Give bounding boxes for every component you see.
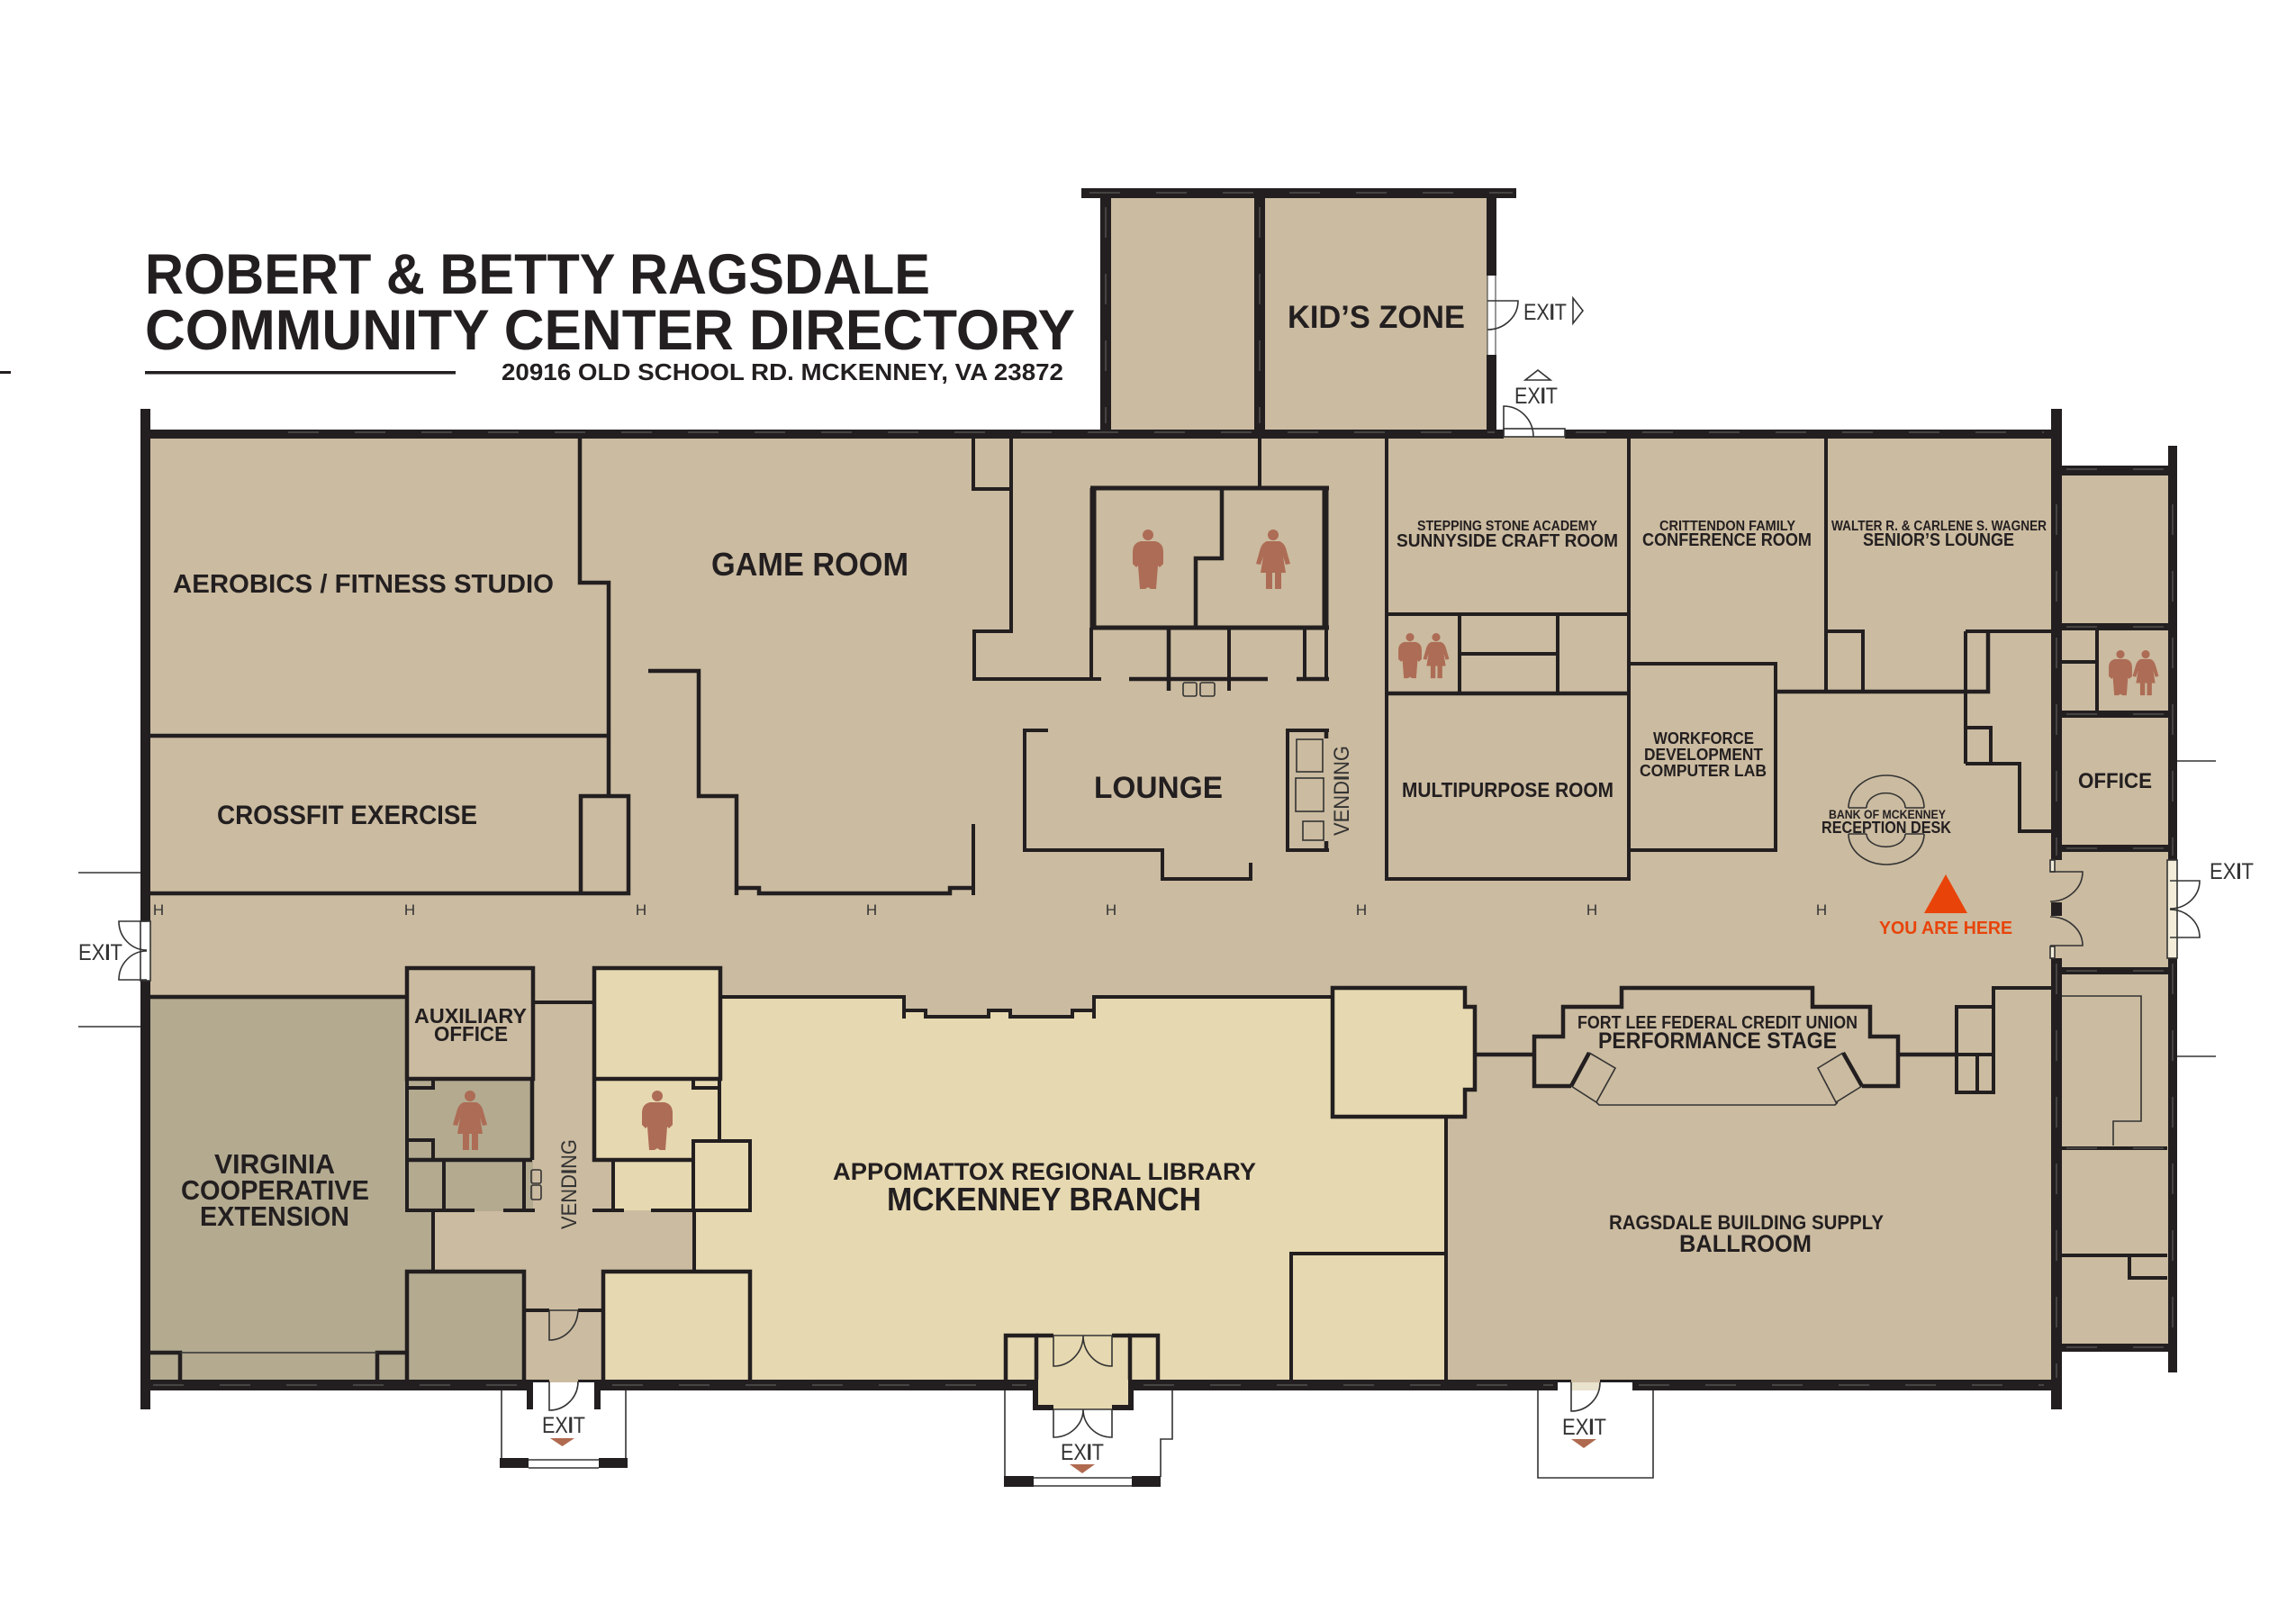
- icon: water fountains: [531, 683, 1215, 1200]
- room label: conference room: CRITTENDON FAMILY: [1659, 519, 1796, 534]
- hallway H markers: H: [1106, 901, 1116, 919]
- room label: performance stage: FORT LEE FEDERAL CREDIT UNION: [1577, 1013, 1858, 1033]
- title: [145, 243, 1075, 362]
- room label: ballroom: RAGSDALE BUILDING SUPPLY: [1609, 1211, 1884, 1234]
- hallway H markers: H: [1586, 901, 1597, 919]
- room label: senior's lounge: SENIOR’S LOUNGE: [1863, 530, 2014, 550]
- exit signs: EXIT: [1514, 384, 1558, 409]
- reception desk: [1821, 775, 1952, 865]
- room label: game room: GAME ROOM: [711, 546, 908, 583]
- room label: computer lab: WORKFORCE: [1653, 729, 1754, 747]
- title: COMMUNITY CENTER DIRECTORY: [145, 299, 1075, 362]
- exit signs: EXIT: [542, 1413, 585, 1438]
- room label: performance stage: [1577, 1013, 1858, 1054]
- you are here marker: YOU ARE HERE: [1879, 919, 2012, 938]
- margin tick: [0, 371, 11, 374]
- center entrance vestibule: [1004, 1336, 1172, 1487]
- room label: crossfit: CROSSFIT EXERCISE: [217, 801, 477, 830]
- room label: ballroom: [1609, 1211, 1884, 1257]
- exit signs: EXIT: [1061, 1440, 1104, 1465]
- hallway H markers: H: [636, 901, 646, 919]
- room label: virginia cooperative extension: COOPERATIVE: [181, 1174, 369, 1206]
- room label: ballroom: BALLROOM: [1679, 1230, 1812, 1257]
- room label: computer lab: [1640, 729, 1767, 780]
- hallway H markers: H: [1816, 901, 1827, 919]
- room label: performance stage: PERFORMANCE STAGE: [1598, 1028, 1837, 1054]
- vending labels: VENDING: [1330, 746, 1354, 836]
- reception desk: RECEPTION DESK: [1821, 818, 1952, 837]
- exit signs: EXIT: [2210, 859, 2254, 884]
- hallway H markers: H: [1356, 901, 1367, 919]
- exit signs: EXIT: [1523, 300, 1567, 325]
- room label: craft room: SUNNYSIDE CRAFT ROOM: [1397, 531, 1618, 551]
- exit signs: EXIT: [78, 940, 122, 965]
- exterior walls: [140, 188, 2177, 1409]
- room label: aerobics: AEROBICS / FITNESS STUDIO: [173, 570, 554, 599]
- room label: craft room: [1397, 519, 1618, 551]
- address: 20916 OLD SCHOOL RD. MCKENNEY, VA 23872: [502, 358, 1063, 385]
- room label: library: [833, 1158, 1256, 1218]
- room label: conference room: CONFERENCE ROOM: [1642, 530, 1812, 550]
- room label: multipurpose: MULTIPURPOSE ROOM: [1402, 778, 1614, 801]
- room label: lounge: LOUNGE: [1094, 771, 1223, 805]
- restroom icons: [453, 530, 2158, 1150]
- wall texture marks: [153, 193, 2173, 1385]
- room label: auxiliary office: [414, 1004, 527, 1046]
- room label: kid's zone: KID’S ZONE: [1288, 300, 1465, 335]
- room label: conference room: [1642, 519, 1812, 550]
- you are here marker: [1879, 874, 2012, 938]
- room label: senior's lounge: WALTER R. & CARLENE S. WAGNER: [1831, 519, 2047, 534]
- hallway H markers: H: [866, 901, 877, 919]
- room label: office: OFFICE: [2078, 769, 2152, 793]
- interior walls: [145, 439, 2167, 1380]
- doors and exit frames: [78, 276, 2216, 1478]
- room label: computer lab: COMPUTER LAB: [1640, 762, 1767, 780]
- hallway H markers: H: [404, 901, 415, 919]
- room label: virginia cooperative extension: VIRGINIA: [214, 1148, 335, 1180]
- reception desk: BANK OF MCKENNEY: [1829, 808, 1946, 821]
- room label: auxiliary office: OFFICE: [434, 1022, 508, 1046]
- exit signs: EXIT: [1562, 1415, 1606, 1440]
- room label: library: APPOMATTOX REGIONAL LIBRARY: [833, 1158, 1256, 1185]
- exit signs: [78, 298, 2254, 1473]
- vending labels: VENDING: [557, 1139, 582, 1229]
- title: ROBERT & BETTY RAGSDALE: [145, 243, 930, 306]
- vending machines: [1296, 739, 1324, 840]
- room label: computer lab: DEVELOPMENT: [1644, 746, 1763, 764]
- room label: senior's lounge: [1831, 519, 2047, 550]
- title rule: [145, 371, 456, 375]
- vending labels: [557, 746, 1354, 1229]
- room label: library: MCKENNEY BRANCH: [887, 1181, 1201, 1218]
- hallway H markers: H: [153, 901, 164, 919]
- room label: virginia cooperative extension: EXTENSION: [200, 1200, 349, 1232]
- room label: craft room: STEPPING STONE ACADEMY: [1417, 519, 1598, 534]
- hallway H markers: [153, 901, 1827, 919]
- room label: virginia cooperative extension: [181, 1148, 369, 1232]
- floor plan fills: [145, 193, 2173, 1409]
- room label: auxiliary office: AUXILIARY: [414, 1004, 527, 1028]
